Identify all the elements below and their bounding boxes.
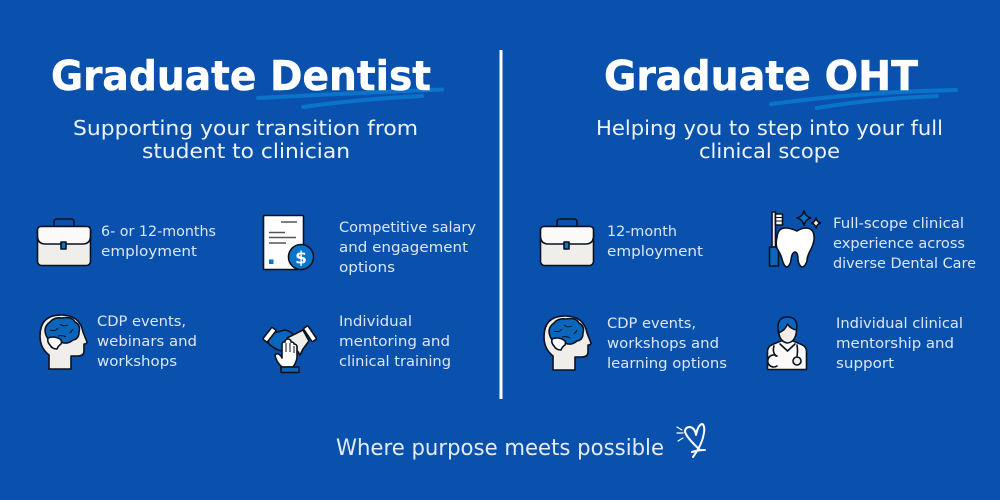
text: CDP events, [607,316,696,332]
heading underline: oht [771,90,956,108]
text: support [836,356,894,372]
text: Competitive salary [339,220,476,236]
item: clinical mentorship [768,316,963,372]
icon: head with brain [40,315,87,369]
text: diverse Dental Care [833,256,976,272]
subheading: dentist [73,116,418,163]
subheading: oht: clinical scope [699,139,840,163]
panel: graduate dentist [38,52,476,372]
icon: head with brain [544,316,591,370]
text: Individual clinical [836,316,963,332]
text: CDP events, [97,314,186,330]
text [607,224,703,260]
icon: contract with dollar coin: $ [295,248,307,268]
item: cdp learning [544,316,727,372]
text: employment [101,244,197,260]
text [833,216,976,272]
item: cdp events [40,314,197,370]
text [339,314,451,370]
icon: briefcase [540,219,594,266]
text: and engagement [339,240,468,256]
item: full-scope experience [770,210,976,272]
text [101,224,216,260]
heading: graduate dentist: Graduate Dentist [51,52,431,100]
text [97,314,197,370]
text: options [339,260,395,276]
text: Individual [339,314,412,330]
text: Full-scope clinical [833,216,964,232]
text [836,316,963,372]
text: 12-month [607,224,677,240]
tagline: Where purpose meets possible [336,436,664,461]
icon: hand-drawn heart [677,424,705,457]
text: experience across [833,236,965,252]
text: workshops and [607,336,719,352]
icon: tooth, toothbrush and sparkles [770,210,820,267]
text: employment [607,244,703,260]
icon: joined hands [263,326,317,372]
subheading: oht [596,116,943,163]
icon: clinician [768,317,806,370]
subheading: oht: Helping you to step into your full [596,116,943,140]
text [607,316,727,372]
subheading: dentist: student to clinician [142,139,350,163]
text: webinars and [97,334,197,350]
text: 6- or 12-months [101,224,216,240]
item: salary [264,216,476,276]
item: mentoring [263,314,451,372]
item: 12-month employment [540,219,703,266]
divider [500,50,502,399]
icon: briefcase [38,219,90,266]
text: learning options [607,356,727,372]
heading underline: dentist [258,90,442,107]
icon: contract with dollar coin [264,216,314,270]
text: mentoring and [339,334,450,350]
item: employment [38,219,216,266]
subheading: dentist: Supporting your transition from [73,116,418,140]
text: workshops [97,354,177,370]
text [339,220,476,276]
heading: graduate oht: Graduate OHT [604,52,918,100]
text: clinical training [339,354,451,370]
panel: graduate oht [540,52,976,372]
text: mentorship and [836,336,954,352]
